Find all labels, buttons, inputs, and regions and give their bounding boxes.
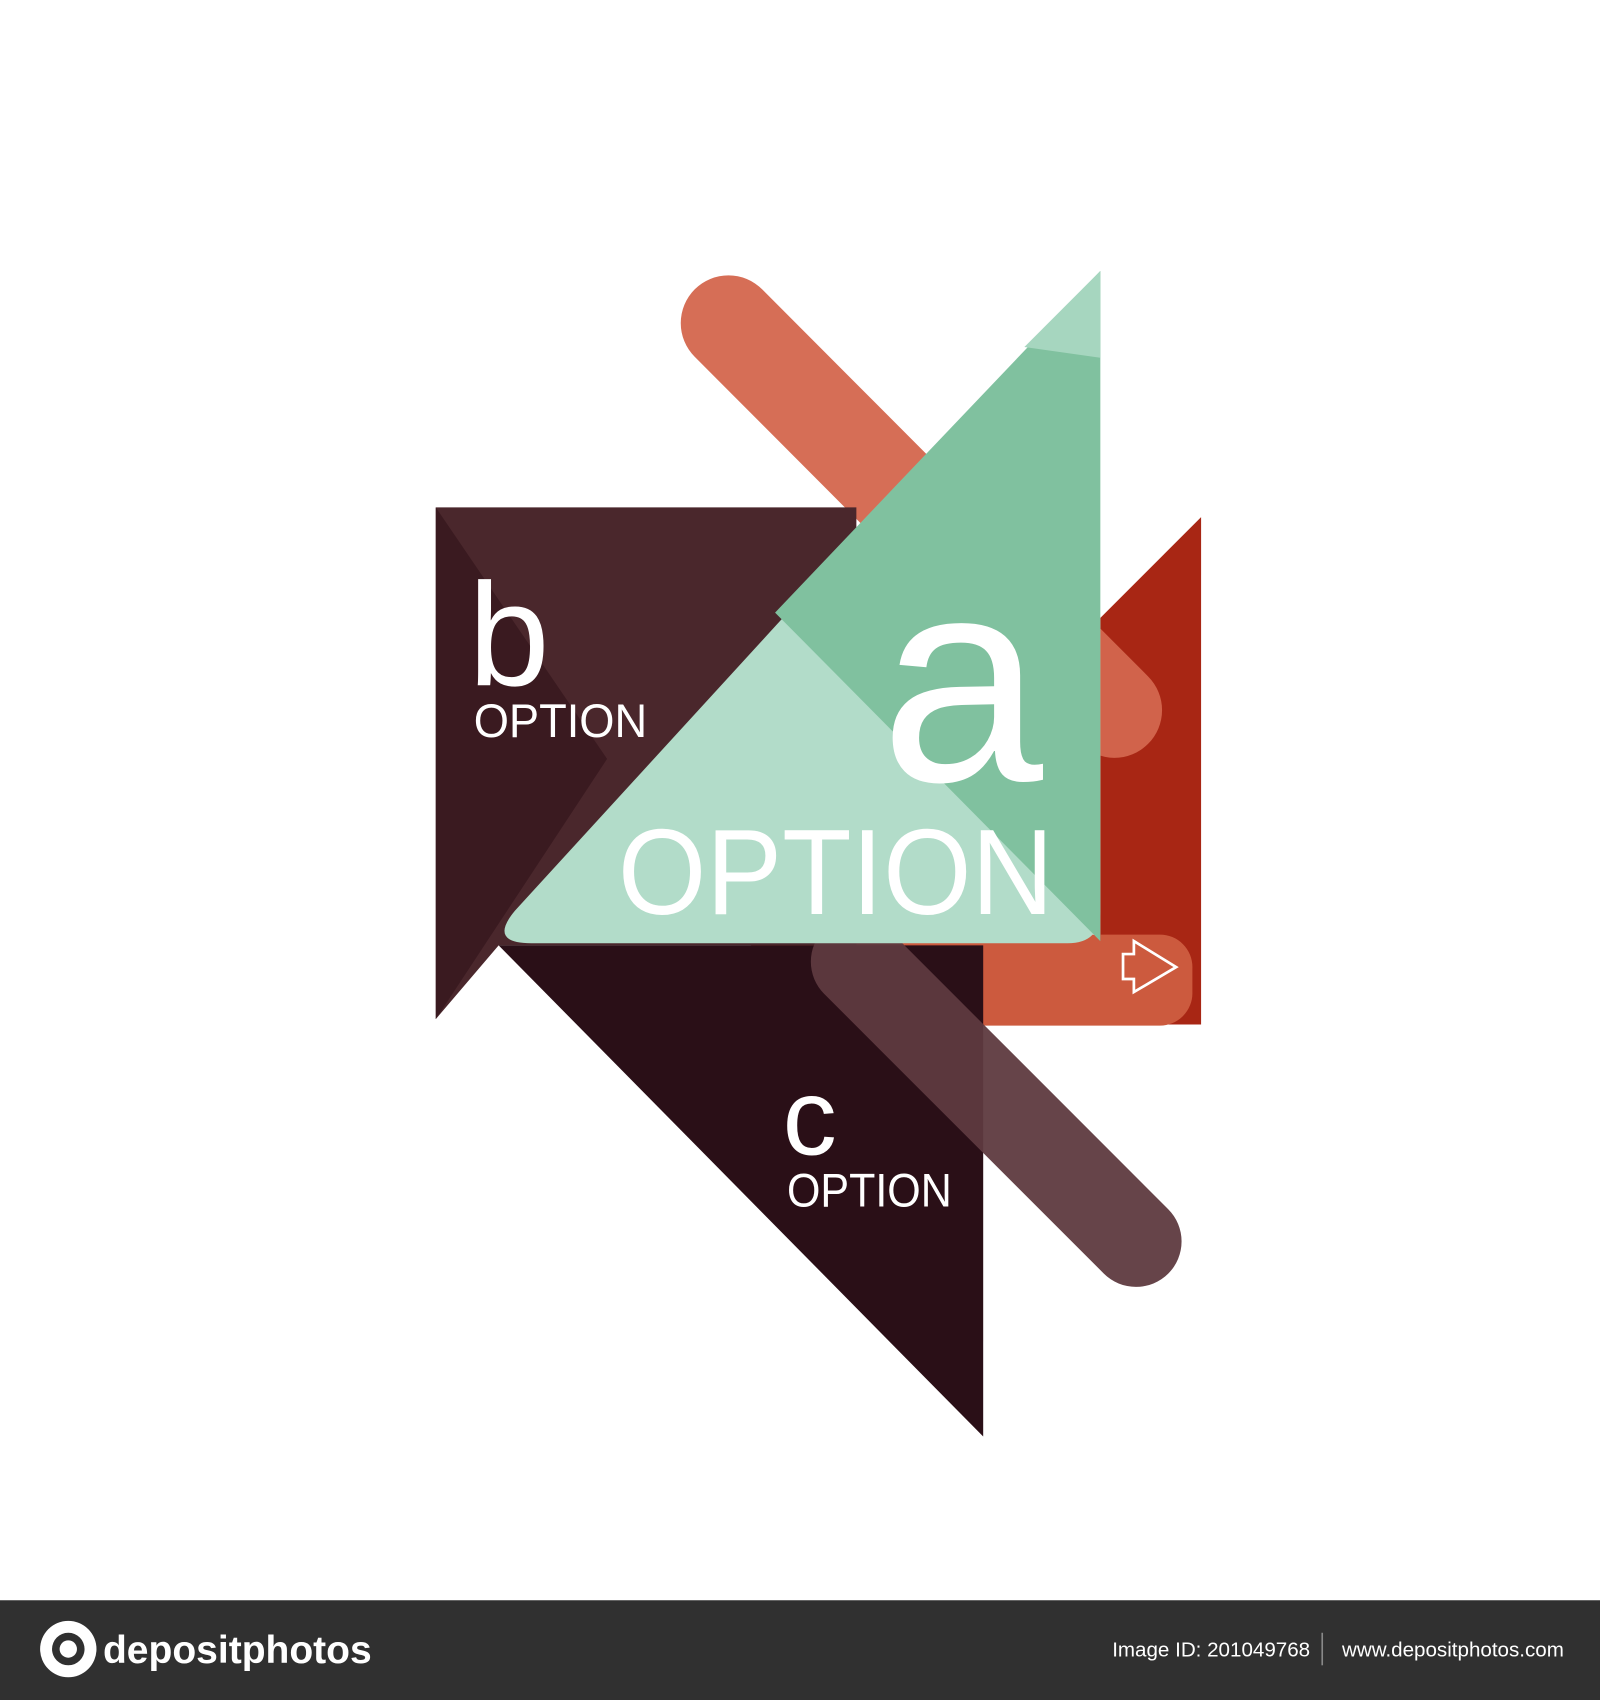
icon: arrow outline	[1123, 941, 1176, 992]
footer bar	[0, 1600, 1600, 1700]
text: option c label: c	[783, 1057, 837, 1178]
shape: orange bottom bar	[743, 935, 1192, 1026]
text: option b label: b	[468, 554, 550, 717]
text: option a label	[618, 517, 1054, 940]
text: option a label: a	[880, 517, 1045, 844]
shape: red right triangle panel	[1100, 517, 1201, 1025]
text: brand: depositphotos	[103, 1629, 372, 1672]
panel: option b dark square	[436, 507, 856, 1019]
text: website: www.depositphotos.com	[1341, 1639, 1564, 1662]
panel: option c dark triangle	[499, 945, 983, 1437]
text: option c label: OPTION	[787, 1165, 952, 1218]
text: option b label: OPTION	[474, 695, 647, 748]
text: option a label: OPTION	[618, 804, 1054, 940]
text: option c label	[783, 1057, 952, 1218]
shape: orange diagonal bar	[728, 323, 1114, 710]
text: image id: Image ID: 201049768	[1112, 1639, 1310, 1662]
text: option b label	[468, 554, 647, 748]
icon: logo	[40, 1621, 96, 1677]
shape: mauve diagonal bar	[856, 962, 1136, 1241]
panel: option a green triangle	[504, 271, 1100, 943]
